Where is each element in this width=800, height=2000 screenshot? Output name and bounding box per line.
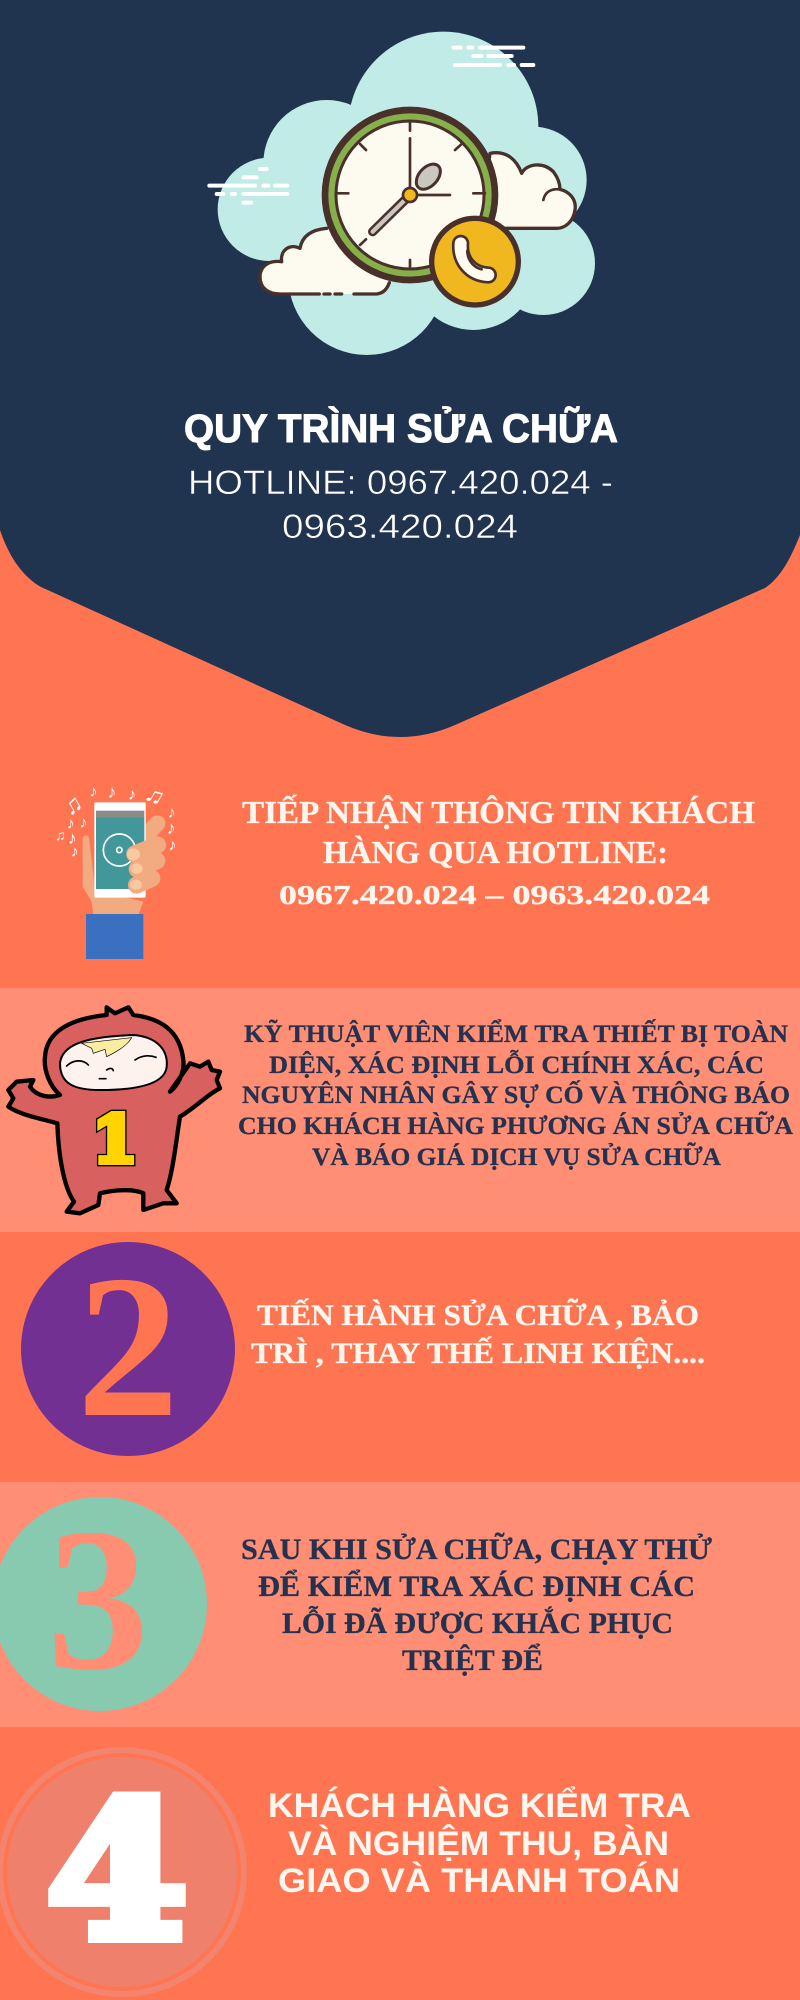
icon: hand holding phone with music notes: ♪ bbox=[68, 828, 77, 848]
icon: hand holding phone with music notes: ♪ bbox=[79, 814, 87, 831]
number badge 3: 3 bbox=[47, 1487, 149, 1713]
icon: hand holding phone with music notes: ♫ bbox=[140, 780, 170, 812]
hotline text: 0963.420.024 bbox=[282, 508, 518, 546]
panel: step 4 bbox=[0, 1750, 691, 1994]
title: QUY TRÌNH SỬA CHỮA bbox=[184, 405, 618, 451]
icon: hand holding phone with music notes: ♪ bbox=[89, 784, 97, 801]
hotline text bbox=[188, 464, 613, 546]
icon: hand holding phone with music notes: ♪ bbox=[71, 844, 79, 861]
icon: clock and phone on cloud bbox=[209, 32, 595, 355]
icon: mascot with number 1: 1 bbox=[92, 1102, 138, 1178]
hotline text: HOTLINE: 0967.420.024 - bbox=[188, 464, 613, 502]
step text: TRÌ , THAY THẾ LINH KIỆN.... bbox=[251, 1336, 705, 1370]
step text: TIẾP NHẬN THÔNG TIN KHÁCH bbox=[242, 794, 755, 830]
icon: hand holding phone with music notes: ♪ bbox=[168, 804, 176, 821]
step text: HÀNG QUA HOTLINE: bbox=[323, 834, 668, 870]
step text: DIỆN, XÁC ĐỊNH LỖI CHÍNH XÁC, CÁC bbox=[269, 1049, 764, 1079]
panel: step 1 bbox=[0, 988, 800, 1232]
icon: hand holding phone with music notes: ♪ bbox=[168, 837, 176, 854]
step text: TRIỆT ĐỂ bbox=[402, 1644, 543, 1677]
step text: TIẾN HÀNH SỬA CHỮA , BẢO bbox=[257, 1298, 699, 1332]
step text: GIAO VÀ THANH TOÁN bbox=[278, 1862, 680, 1900]
step text: KỸ THUẬT VIÊN KIỂM TRA THIẾT BỊ TOÀN bbox=[244, 1019, 789, 1048]
icon: hand holding phone with music notes: ♪ bbox=[128, 786, 136, 803]
step text: CHO KHÁCH HÀNG PHƯƠNG ÁN SỬA CHỮA bbox=[238, 1111, 794, 1140]
step text: VÀ BÁO GIÁ DỊCH VỤ SỬA CHỮA bbox=[312, 1142, 722, 1171]
icon: mascot with number 1: 1 bbox=[92, 1102, 138, 1178]
icon: hand holding phone with music notes: ♫ bbox=[55, 827, 65, 843]
header chevron background bbox=[0, 0, 800, 737]
panel: step 2 bbox=[21, 1234, 705, 1460]
number badge 4 bbox=[0, 1750, 244, 1994]
icon: hand holding phone with music notes: ♪ bbox=[167, 818, 176, 838]
step text: LỖI ĐÃ ĐƯỢC KHẮC PHỤC bbox=[282, 1606, 673, 1640]
icon: hand holding phone with music notes: ♪ bbox=[67, 816, 75, 833]
step text: SAU KHI SỬA CHỮA, CHẠY THỬ bbox=[241, 1532, 712, 1566]
number badge 2 bbox=[21, 1234, 235, 1460]
number badge 2: 2 bbox=[77, 1234, 179, 1460]
icon: hand holding phone with music notes bbox=[55, 780, 176, 959]
icon: hand holding phone with music notes: ♫ bbox=[59, 789, 88, 822]
step text: VÀ NGHIỆM THU, BÀN bbox=[288, 1825, 669, 1863]
step text: NGUYÊN NHÂN GÂY SỰ CỐ VÀ THÔNG BÁO bbox=[242, 1080, 790, 1109]
step text: ĐỂ KIỂM TRA XÁC ĐỊNH CÁC bbox=[258, 1570, 695, 1603]
step text: KHÁCH HÀNG KIỂM TRA bbox=[268, 1787, 691, 1825]
panel: receive information bbox=[55, 780, 755, 959]
step text bbox=[241, 1532, 712, 1677]
icon: mascot with number 1 bbox=[8, 1007, 220, 1213]
icon: hand holding phone with music notes: ♪ bbox=[107, 782, 116, 802]
step text bbox=[251, 1298, 705, 1370]
step text bbox=[238, 1019, 794, 1171]
panel: step 3 bbox=[0, 1482, 800, 1727]
step text: 0967.420.024 – 0963.420.024 bbox=[279, 880, 710, 910]
panel: header bbox=[0, 0, 800, 737]
number badge 3 bbox=[0, 1487, 207, 1713]
step text bbox=[242, 794, 755, 910]
step text bbox=[268, 1787, 691, 1900]
number badge 4: 4 bbox=[46, 1761, 188, 1982]
